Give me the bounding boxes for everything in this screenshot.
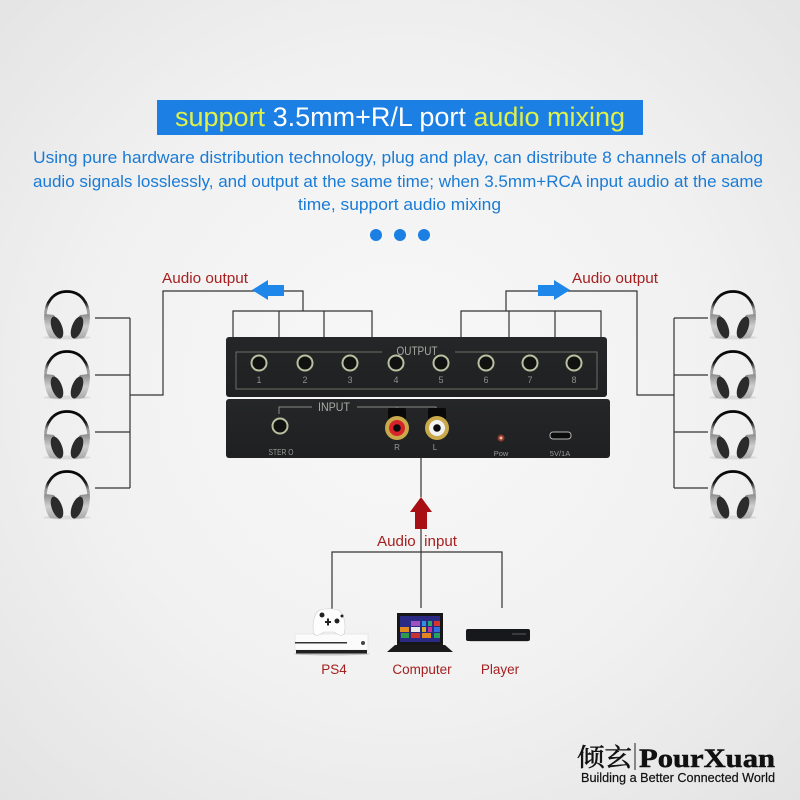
arrow: audio input — [410, 497, 432, 529]
description text: audio signals losslessly, and output at the same time; when 3.5mm+RCA input audio at the same — [33, 172, 763, 191]
device labels: Computer — [392, 662, 452, 677]
headphones: left column — [43, 292, 91, 520]
micro USB port — [550, 432, 571, 458]
title banner: support 3.5mm+R/L port audio mixing — [175, 102, 625, 132]
RCA R jack: R — [394, 443, 400, 452]
device labels — [321, 662, 520, 677]
output numbers: 4 — [393, 375, 399, 385]
output numbers: 6 — [483, 375, 489, 385]
power LED — [494, 434, 509, 458]
device labels: PS4 — [321, 662, 347, 677]
description text: time, support audio mixing — [298, 195, 501, 214]
stereo jack — [272, 418, 288, 434]
device: output panel — [226, 337, 607, 397]
wiring: audio input — [332, 458, 502, 610]
output numbers: 5 — [438, 375, 444, 385]
wiring: left outputs — [95, 291, 372, 488]
output numbers: 2 — [302, 375, 308, 385]
icon: laptop — [387, 613, 453, 652]
headphones: right column — [709, 292, 757, 520]
output numbers: 8 — [571, 375, 577, 385]
device: input panel: STER O — [268, 448, 294, 457]
description text — [33, 148, 763, 214]
output numbers: 1 — [256, 375, 262, 385]
pagination dots — [370, 229, 430, 241]
RCA L jack: L — [433, 443, 438, 452]
RCA L jack — [425, 408, 449, 452]
icon: game console — [294, 609, 370, 656]
power LED: Pow — [494, 449, 509, 458]
arrow: left output — [252, 280, 284, 300]
device labels: Player — [481, 662, 520, 677]
output numbers — [256, 375, 577, 385]
micro USB port: 5V/1A — [550, 449, 570, 458]
output jacks — [252, 356, 582, 370]
arrow: right output — [538, 280, 570, 300]
device: output panel: OUTPUT — [396, 346, 438, 358]
output numbers: 3 — [347, 375, 353, 385]
RCA R jack — [385, 408, 409, 452]
description text: Using pure hardware distribution technology, plug and play, can distribute 8 channels of analog — [33, 148, 763, 167]
icon: media player — [466, 629, 530, 642]
output numbers: 7 — [527, 375, 533, 385]
logo — [577, 738, 776, 785]
device: input panel — [226, 399, 610, 458]
wiring: right outputs — [461, 291, 708, 488]
logo: Building a Better Connected World — [581, 771, 775, 785]
logo: 倾玄 — [577, 738, 632, 774]
label: audio input: Audio input — [377, 534, 457, 550]
label: right audio output: Audio output — [572, 271, 658, 287]
device: input panel: INPUT — [318, 402, 350, 414]
label: left audio output: Audio output — [162, 271, 248, 287]
logo: PourXuan — [639, 744, 776, 773]
